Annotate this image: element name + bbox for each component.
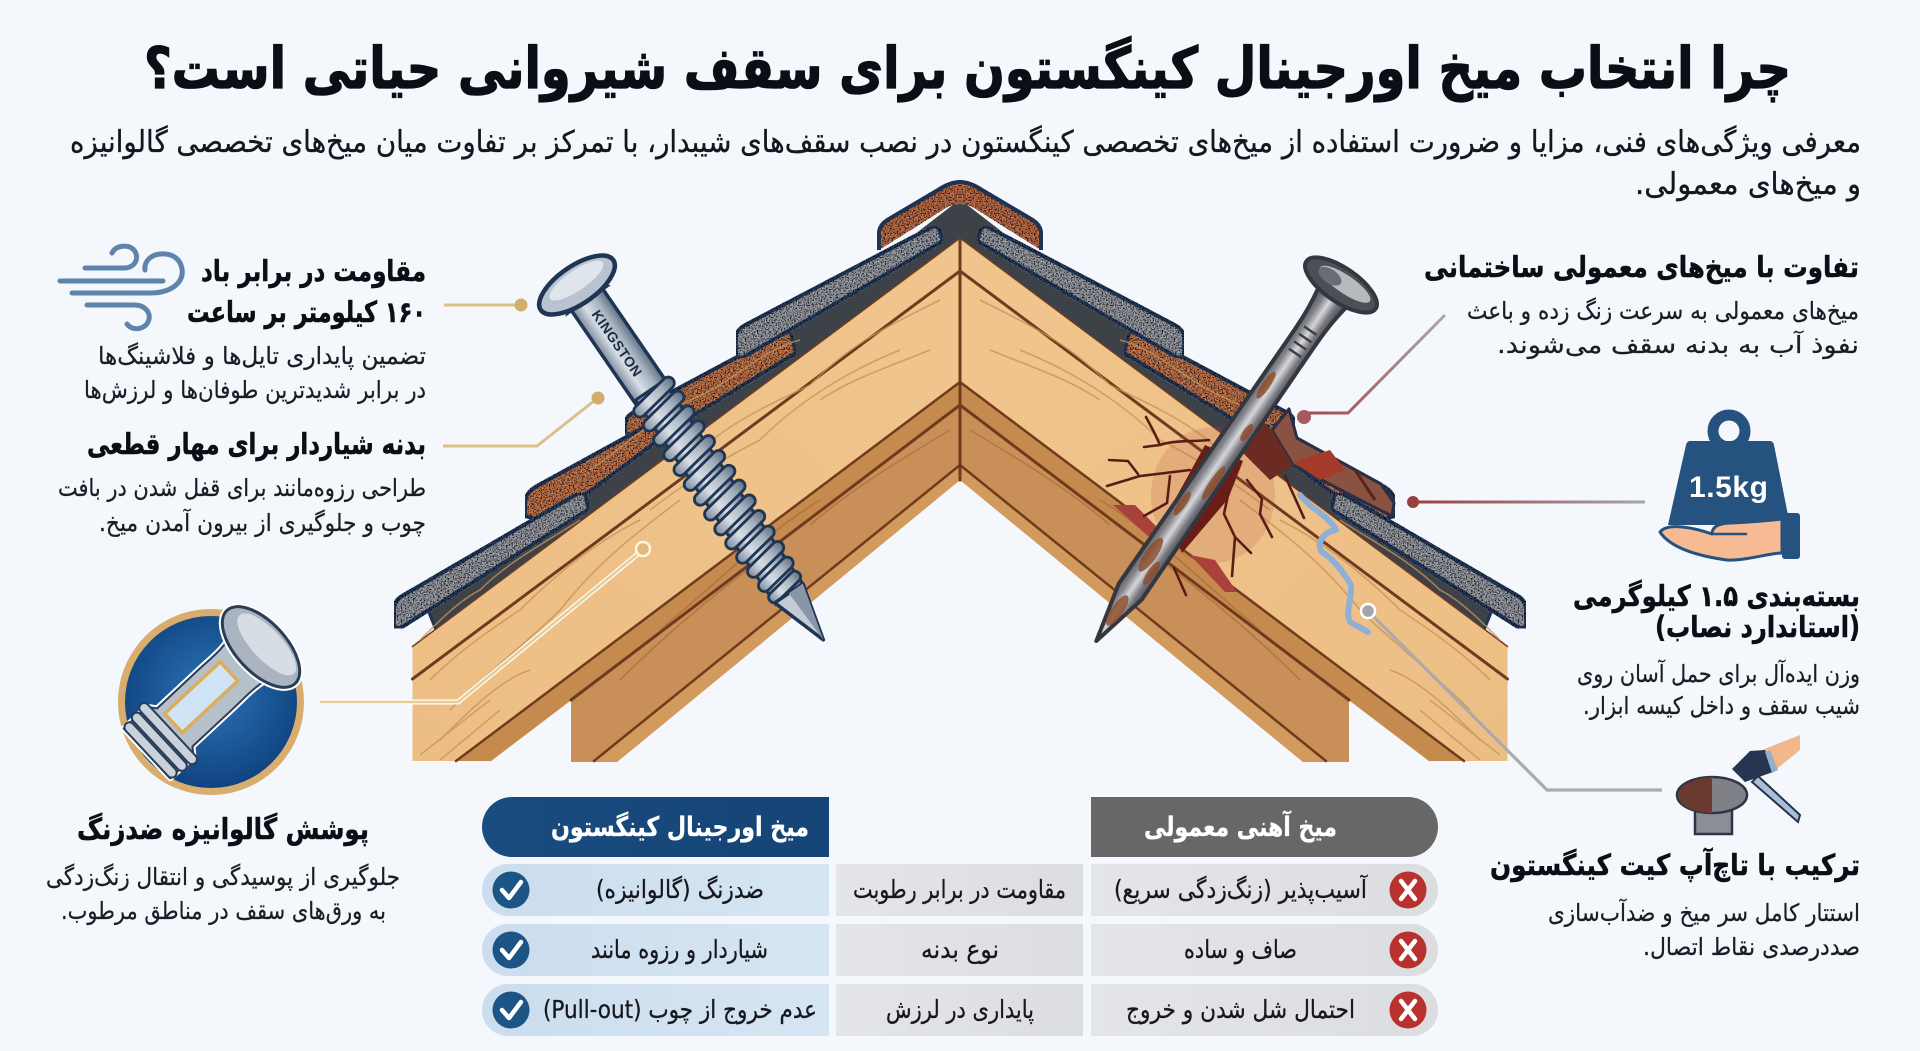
text block: 1.5 kg packaging: شیب سقف و داخل کیسه ابزار. <box>1583 692 1860 720</box>
row: body type: نوع بدنه <box>921 935 999 964</box>
text block: threaded body: بدنه شیاردار برای مهار قطعی <box>87 427 426 461</box>
galvanized threaded nail <box>530 244 858 666</box>
row: body type: صاف و ساده <box>1184 935 1297 965</box>
rusty common nail <box>1062 247 1385 665</box>
leader: wind resistance <box>444 298 528 312</box>
text block: 1.5 kg packaging: وزن ایده‌آل برای حمل آسان روی <box>1577 659 1860 688</box>
row: moisture resistance: آسیب‌پذیر (زنگ‌زدگی سریع) <box>1114 874 1368 905</box>
text block: wind resistance: ۱۶۰ کیلومتر بر ساعت <box>187 295 426 329</box>
text block: galvanized coating: به ورق‌های سقف در مناطق مرطوب. <box>61 897 386 925</box>
icon: wind <box>60 246 182 329</box>
text block: 1.5 kg packaging: بسته‌بندی ۱.۵ کیلوگرمی <box>1573 579 1860 613</box>
leader: 1.5 kg pack <box>1407 496 1645 508</box>
row: vibration stability <box>482 984 1438 1036</box>
row: vibration stability: احتمال شل شدن و خروج <box>1126 995 1355 1025</box>
left half of roof <box>394 182 960 762</box>
header: common iron nail <box>1091 797 1438 857</box>
text block: wind resistance: تضمین پایداری تایل‌ها و فلاشینگ‌ها <box>98 342 426 370</box>
text block: galvanized coating: پوشش گالوانیزه ضدزنگ <box>77 812 369 847</box>
row: vibration stability: پایداری در لرزش <box>886 995 1034 1024</box>
comparison table <box>482 797 1438 1036</box>
galvanized threaded nail: KINGSTON <box>589 307 646 380</box>
icon: 1.5 kg weight on hand: 1.5kg <box>1689 471 1768 504</box>
text block: difference from common nails: نفوذ آب به بدنه سقف می‌شوند. <box>1497 330 1859 359</box>
row: body type <box>482 924 1438 976</box>
text block: difference from common nails: میخ‌های معمولی به سرعت زنگ زده و باعث <box>1467 297 1859 325</box>
text block: wind resistance: در برابر شدیدترین طوفان‌ها و لرزش‌ها <box>84 376 426 404</box>
cross icons <box>1390 872 1426 1028</box>
row: moisture resistance: ضدزنگ (گالوانیزه) <box>596 875 764 904</box>
leader: galvanized coating <box>320 542 650 702</box>
water leak <box>1300 495 1368 632</box>
row: body type: شیاردار و رزوه مانند <box>591 935 768 965</box>
text block: threaded body: طراحی رزوه‌مانند برای قفل شدن در بافت <box>58 474 426 502</box>
row: moisture resistance: مقاومت در برابر رطوبت <box>853 875 1066 905</box>
subtitle: و میخ‌های معمولی. <box>1635 167 1861 202</box>
icon: touch-up brush on nail head <box>1677 735 1800 834</box>
text block: galvanized coating: جلوگیری از پوسیدگی و انتقال زنگ‌زدگی <box>46 863 400 891</box>
row: moisture resistance <box>482 864 1438 916</box>
text block: 1.5 kg packaging <box>1573 579 1860 720</box>
text block: wind resistance <box>84 254 426 404</box>
check icons <box>492 872 530 1028</box>
roof damage around rusty nail <box>1107 400 1394 595</box>
header: common iron nail: میخ آهنی معمولی <box>1144 810 1337 843</box>
leader: common nail difference <box>1297 315 1445 424</box>
icon: 1.5 kg weight on hand <box>1660 415 1800 560</box>
right half of roof <box>960 182 1526 762</box>
leader: threaded body <box>443 392 604 446</box>
text block: 1.5 kg packaging: (استاندارد نصاب) <box>1655 610 1860 644</box>
roof cross-section <box>394 182 1526 762</box>
text block: touch-up kit: صددرصدی نقاط اتصال. <box>1643 933 1860 961</box>
header: Kingston nail: میخ اورجینال کینگستون <box>551 811 809 843</box>
leader: touch-up kit <box>1361 604 1662 790</box>
text block: threaded body <box>58 427 426 537</box>
text block: wind resistance: مقاومت در برابر باد <box>201 254 426 288</box>
text block: galvanized coating <box>46 812 400 925</box>
text block: touch-up kit: استتار کامل سر میخ و ضدآب‌سازی <box>1548 898 1860 927</box>
text block: threaded body: چوب و جلوگیری از بیرون آمدن میخ. <box>99 508 426 537</box>
icon: galvanized coating badge <box>113 593 313 795</box>
text block: difference from common nails <box>1424 250 1859 359</box>
text block: touch-up kit: ترکیب با تاچ‌آپ کیت کینگستون <box>1490 847 1860 882</box>
header: Kingston nail <box>482 797 829 857</box>
subtitle <box>70 125 1861 202</box>
text block: touch-up kit <box>1490 847 1860 961</box>
row: vibration stability: عدم خروج از چوب (Pull-out) <box>543 995 817 1025</box>
